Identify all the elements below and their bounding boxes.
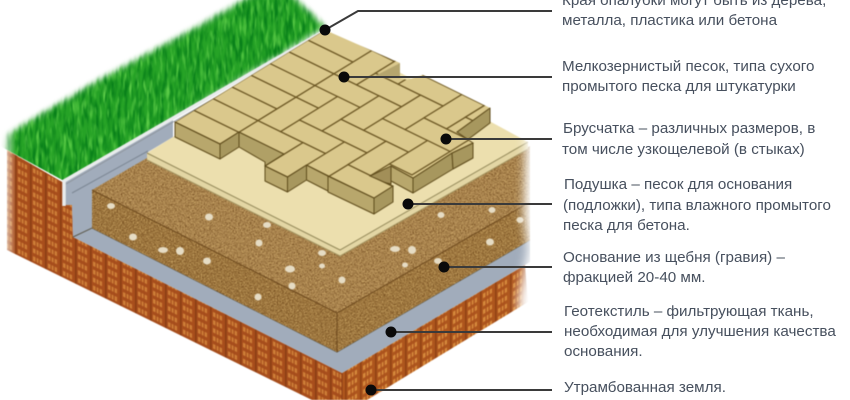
paving stones xyxy=(174,32,492,216)
leader line: geotextile xyxy=(386,326,552,338)
text: paving stones description xyxy=(562,120,815,158)
text: cushion description: Подушка – песок для основания xyxy=(564,176,792,193)
grass xyxy=(4,0,324,186)
text: crushed stone description: фракцией 20-40 мм. xyxy=(563,269,706,286)
paver outline xyxy=(175,108,490,198)
text: geotextile description: Геотекстиль – фильтрующая ткань, xyxy=(564,303,814,320)
crushed stone base xyxy=(92,146,530,352)
text: fine sand description: Мелкозернистый песок, типа сухого xyxy=(562,58,814,75)
paver side faces xyxy=(175,108,490,214)
text: crushed stone description: Основание из щебня (гравия) – xyxy=(563,249,785,266)
compacted soil layer xyxy=(7,150,528,400)
text: paving stones description: том числе узкощелевой (в стыках) xyxy=(562,141,805,158)
leader line: compacted soil xyxy=(366,384,552,396)
text: geotextile description: основания. xyxy=(564,343,643,360)
curb edging xyxy=(64,30,327,206)
text: edging description: металла, пластика или бетона xyxy=(562,12,778,29)
text: fine sand description: промытого песка для штукатурки xyxy=(562,78,796,95)
text: cushion description xyxy=(563,176,831,234)
text: edging description xyxy=(562,0,826,29)
illustration: layered pavement section xyxy=(2,0,530,400)
text: cushion description: песка для бетона. xyxy=(563,217,690,234)
text: paving stones description: Брусчатка – различных размеров, в xyxy=(563,120,815,137)
leader line: crushed stone xyxy=(438,262,552,272)
leader line: cushion xyxy=(402,198,552,210)
sand cushion xyxy=(147,32,528,256)
leader line: fine sand xyxy=(338,72,552,82)
leader line: edging xyxy=(320,11,552,36)
text: geotextile description: необходимая для улучшения качества xyxy=(564,323,836,340)
text: compacted soil description: Утрамбованная земля. xyxy=(564,379,726,396)
left edge fade xyxy=(0,120,16,260)
paver top faces xyxy=(175,32,490,197)
stone pebbles xyxy=(107,203,524,300)
text: crushed stone description xyxy=(563,249,785,286)
back notch side face xyxy=(373,63,400,78)
text: geotextile description xyxy=(564,303,836,360)
leader line: paving stones xyxy=(440,134,552,144)
text: fine sand description xyxy=(562,58,814,95)
text: cushion description: (подложки), типа влажного промытого xyxy=(563,197,831,214)
geotextile and curb band xyxy=(64,120,530,373)
white fade on right edge xyxy=(330,0,850,400)
